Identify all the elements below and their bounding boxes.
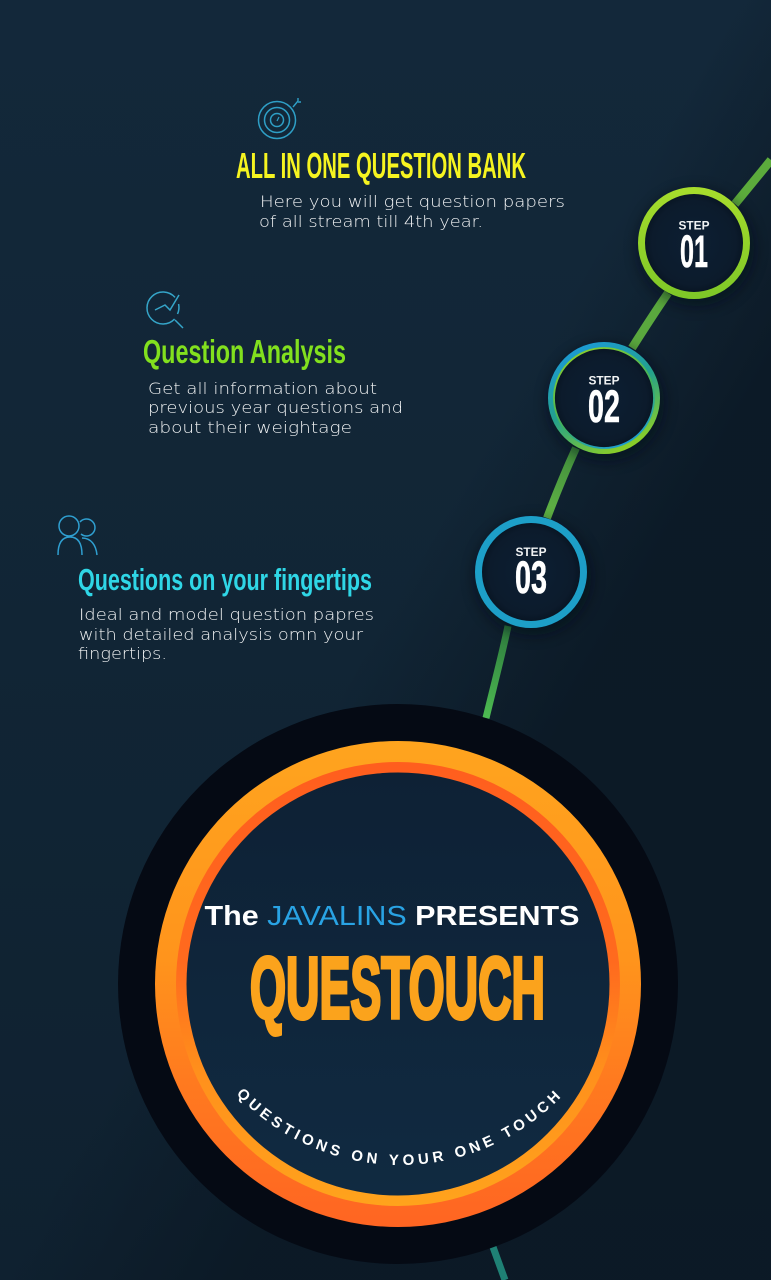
step 01 badge: STEP: [678, 218, 710, 232]
text block: fingertips description: Ideal and model question papres: [79, 605, 374, 624]
panel: questions on your fingertips: [58, 516, 374, 663]
step 02 badge: [548, 345, 664, 461]
text block: question bank description: of all stream till 4th year.: [259, 212, 483, 231]
icon: target: [258, 98, 301, 138]
icon: magnifier with chart: [147, 292, 183, 328]
step 02 badge: STEP: [588, 374, 620, 388]
step 03 badge: [475, 519, 591, 635]
timeline path: [486, 160, 771, 1280]
step 03 badge: STEP: [516, 545, 546, 559]
text block: fingertips description: [78, 605, 374, 663]
text block: question bank description: [259, 192, 565, 231]
icon: two people: [58, 516, 97, 555]
text block: question bank description: Here you will get question papers: [260, 192, 565, 211]
title: the javalins presents: The JAVALINS PRESENTS: [204, 900, 580, 931]
step 02 badge: 02: [588, 381, 620, 432]
step 03 badge: 03: [515, 552, 547, 603]
text block: question analysis description: [148, 379, 403, 437]
panel: question analysis: [143, 292, 403, 437]
step 01 badge: 01: [680, 226, 708, 277]
text block: question analysis description: previous year questions and: [148, 398, 403, 417]
text block: question analysis description: about their weightage: [148, 418, 352, 437]
text block: fingertips description: with detailed analysis omn your: [79, 625, 363, 644]
panel: all in one question bank: [236, 98, 565, 231]
heading: question analysis: Question Analysis: [143, 333, 346, 370]
heading: questions on your fingertips: Questions on your fingertips: [78, 562, 372, 597]
step 01 badge: [638, 190, 754, 306]
heading: all in one question bank: ALL IN ONE QUESTION BANK: [236, 145, 526, 186]
text block: question analysis description: Get all information about: [148, 379, 377, 398]
text block: fingertips description: fingertips.: [78, 644, 167, 663]
curved tagline: QUESTIONS ON YOUR ONE TOUCH: [238, 1089, 560, 1165]
main circle badge: [118, 704, 678, 1264]
